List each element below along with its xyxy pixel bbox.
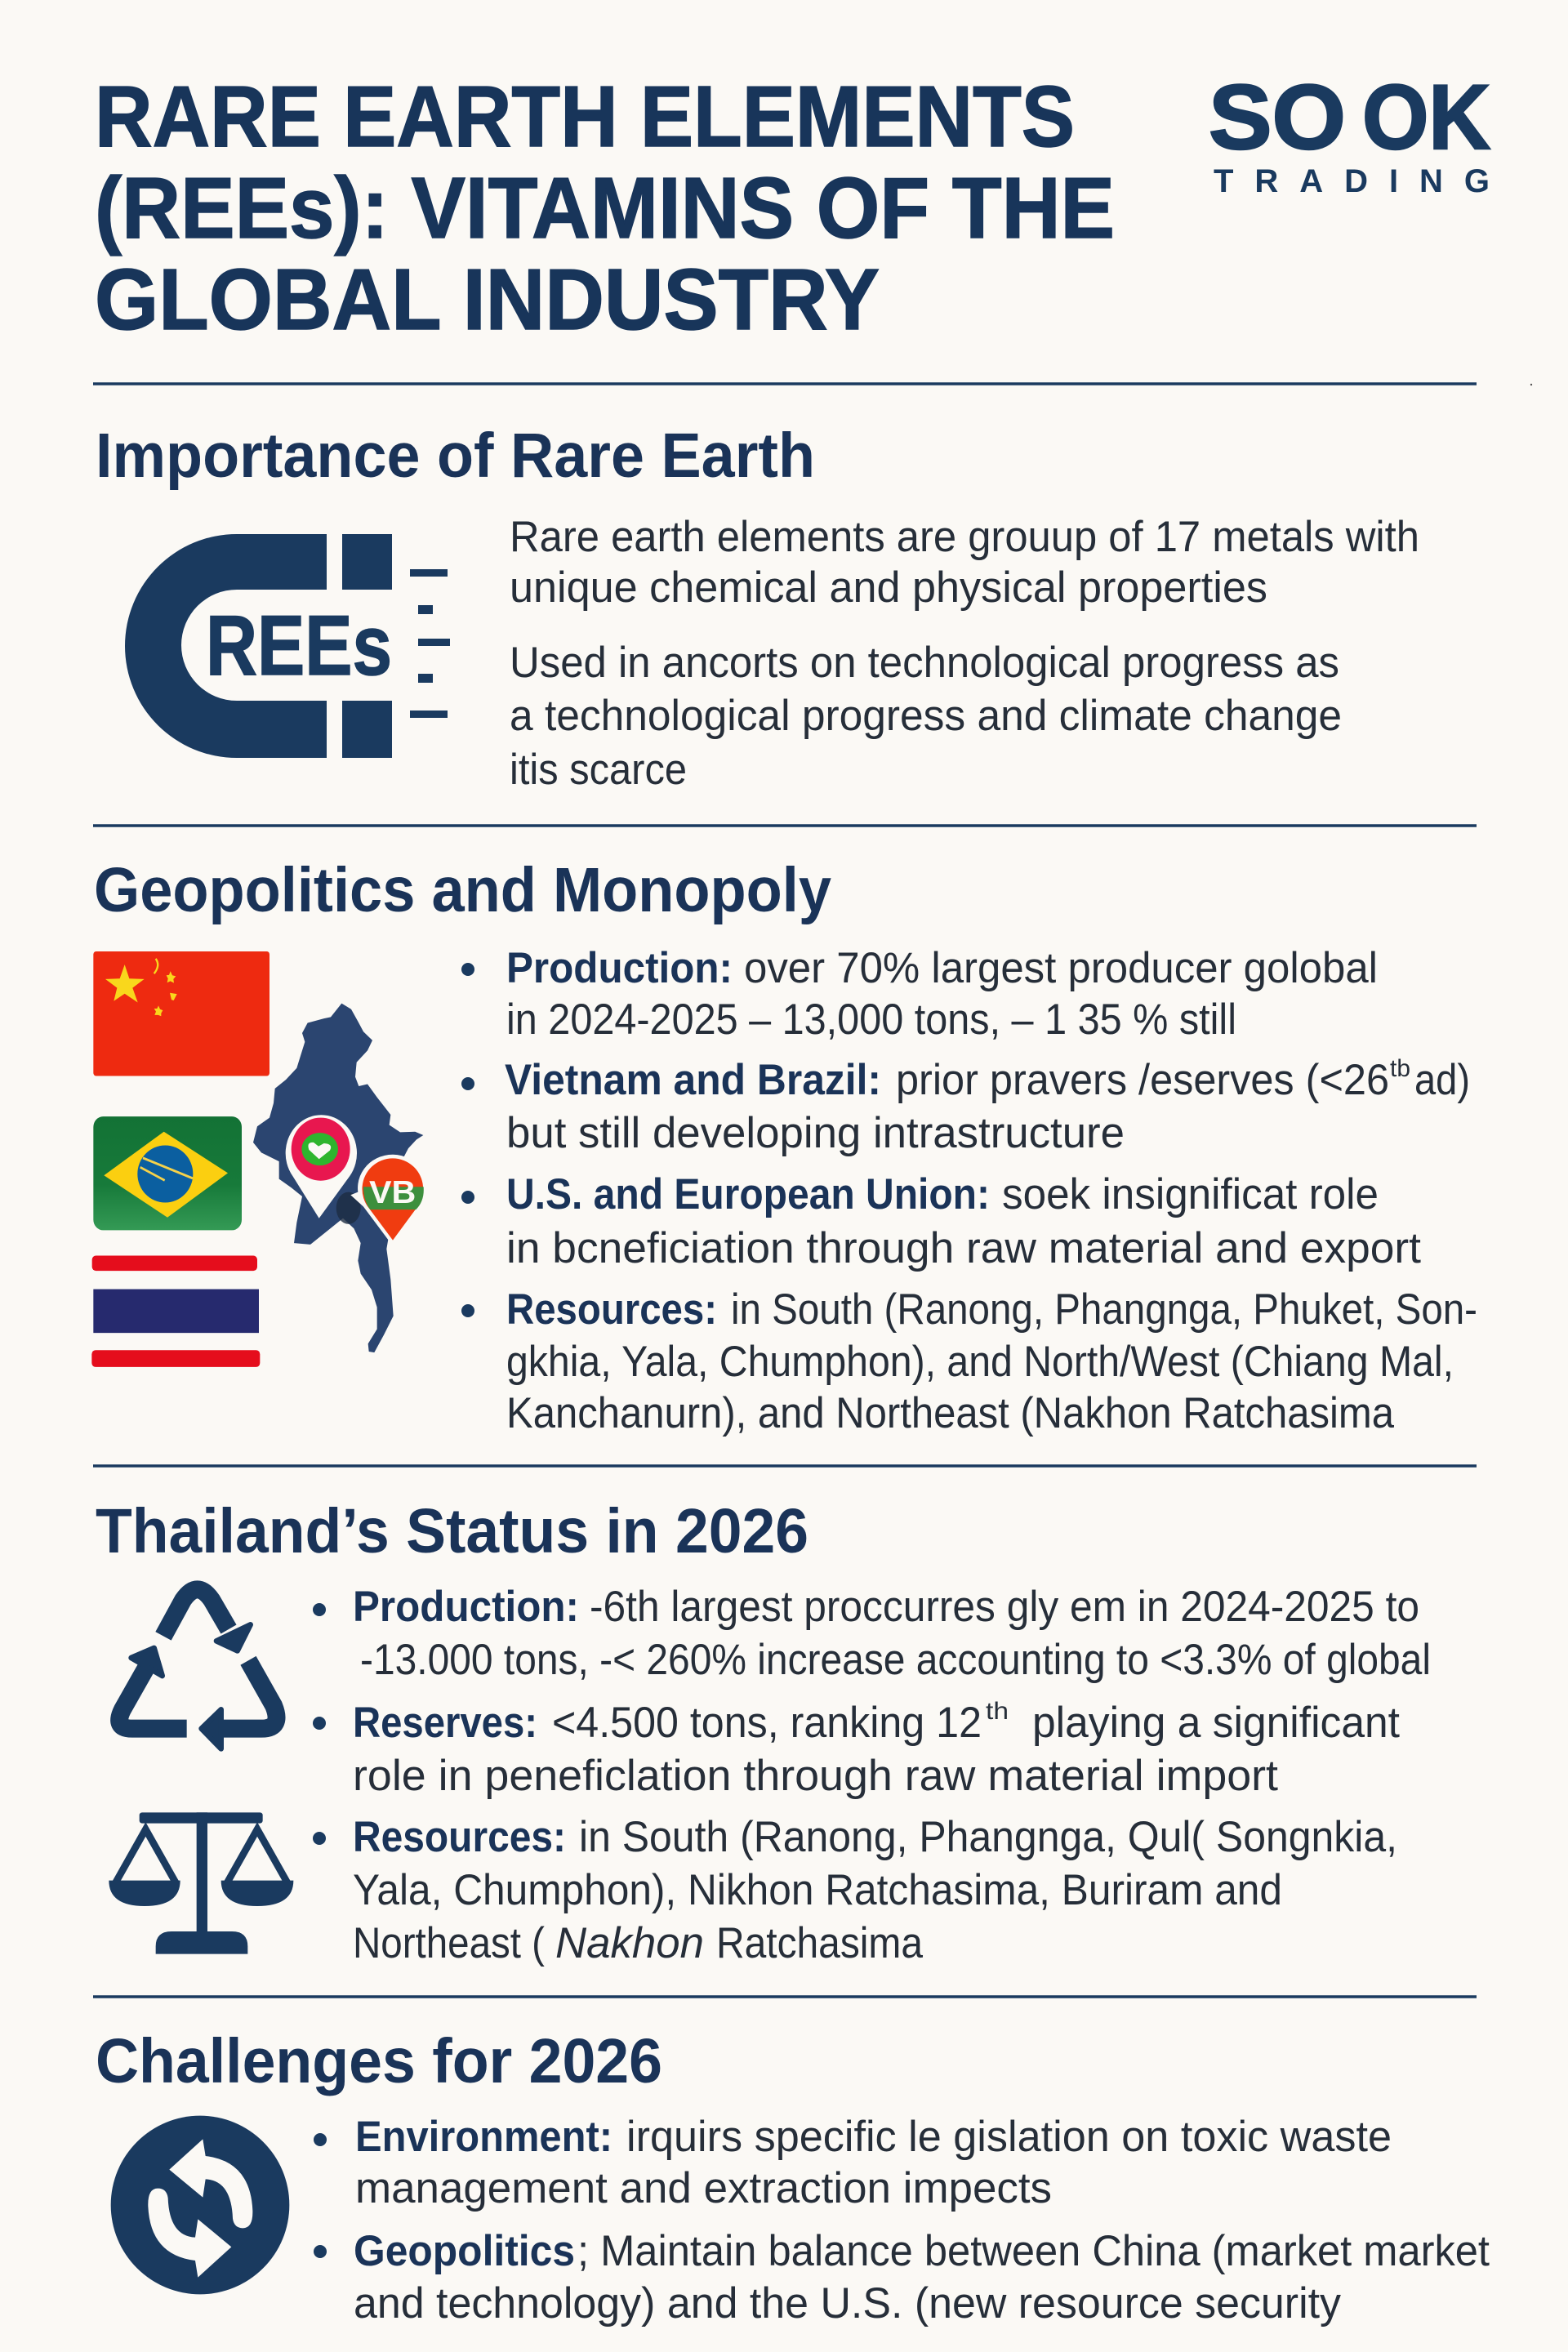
panel: Thailand's status in 2026	[96, 1496, 1431, 1967]
text block: importance description: unique chemical and physical properties	[510, 564, 1267, 612]
bullet list: Thailand status: Reserves:	[353, 1699, 537, 1747]
bullet list: geopolitics: Vietnam and Brazil:	[505, 1056, 881, 1104]
logo: So Ok Trading: OK	[1362, 66, 1490, 168]
bullet list: challenges: management and extraction impects	[355, 2164, 1052, 2212]
bullet list: geopolitics: tb	[1390, 1055, 1410, 1082]
heading: challenges: Challenges for 2026	[96, 2026, 662, 2096]
text block: importance description: Rare earth elements are grouup of 17 metals with	[510, 513, 1419, 561]
bullet list: geopolitics: in bcneficiation through raw material and export	[506, 1224, 1421, 1272]
text block: importance description: Used in ancorts on technological progress as	[510, 639, 1339, 687]
icon: REEs magnet: REEs	[206, 599, 392, 693]
bullet list: geopolitics: in South (Ranong, Phangnga, Phuket, Son-	[731, 1285, 1477, 1334]
icon: map with location pins	[253, 1004, 427, 1352]
bullet list: geopolitics	[461, 944, 1477, 1437]
bullet list: challenges: irquirs specific le gislation on toxic waste	[626, 2113, 1392, 2161]
bullet list: Thailand status: Yala, Chumphon), Nikhon Ratchasima, Buriram and	[353, 1866, 1282, 1914]
bullet list: Thailand status: Ratchasima	[716, 1919, 923, 1967]
icon: REEs magnet	[125, 534, 450, 758]
bullet list: Thailand status: in South (Ranong, Phangnga, Qul( Songnkia,	[579, 1813, 1397, 1861]
text block: importance description: a technological progress and climate change	[510, 692, 1342, 740]
logo: So Ok Trading	[1209, 66, 1490, 199]
text block: importance description: itis scarce	[510, 746, 687, 794]
bullet list: challenges	[314, 2113, 1490, 2328]
title: (REEs): VITAMINS OF THE	[95, 160, 1115, 256]
bullet list: Thailand status: Northeast (	[353, 1919, 545, 1967]
bullet list: challenges: Environment:	[355, 2113, 612, 2161]
icon: flag of Brazil	[93, 1116, 242, 1230]
heading: geopolitics: Geopolitics and Monopoly	[94, 855, 831, 925]
bullet list: geopolitics: Kanchanurn), and Northeast (Nakhon Ratchasima	[506, 1389, 1394, 1437]
pin: red and green heart	[286, 1115, 357, 1218]
panel: importance of rare earth	[96, 421, 1419, 794]
panel: challenges for 2026	[96, 2026, 1490, 2328]
bullet list: geopolitics: soek insignificat role	[1002, 1170, 1379, 1218]
bullet list: geopolitics: ad)	[1414, 1056, 1470, 1104]
bullet list: Thailand status: Production:	[353, 1583, 579, 1631]
bullet list: geopolitics: in 2024-2025 – 13,000 tons, – 1 35 % still	[506, 996, 1236, 1044]
bullet list: Thailand status	[313, 1583, 1431, 1967]
icon: flag of Thailand	[91, 1255, 260, 1367]
icon: circular refresh arrows	[111, 2116, 289, 2294]
bullet list: geopolitics: Resources:	[506, 1285, 717, 1334]
logo: So Ok Trading: SO	[1209, 66, 1346, 168]
panel: geopolitics and monopoly	[91, 855, 1477, 1437]
bullet list: challenges: ; Maintain balance between China (market market	[577, 2227, 1490, 2275]
bullet list: Thailand status: playing a significant	[1032, 1699, 1400, 1747]
title	[95, 69, 1115, 348]
heading: Thailand status: Thailand’s Status in 2026	[96, 1496, 808, 1566]
bullet list: Thailand status: <4.500 tons, ranking 12	[552, 1699, 982, 1747]
bullet list: Thailand status: th	[986, 1698, 1009, 1725]
bullet list: geopolitics: U.S. and European Union:	[506, 1170, 990, 1218]
heading: importance: Importance of Rare Earth	[96, 421, 815, 491]
bullet list: challenges: Geopolitics	[354, 2227, 575, 2275]
bullet list: Thailand status: -13.000 tons, -< 260% increase accounting to <3.3% of global	[360, 1636, 1431, 1684]
logo: So Ok Trading: TRADING	[1214, 163, 1490, 199]
bullet list: geopolitics: gkhia, Yala, Chumphon), and North/West (Chiang Mal,	[506, 1338, 1454, 1386]
bullet list: Thailand status: -6th largest proccurres gly em in 2024-2025 to	[590, 1583, 1419, 1631]
bullet list: challenges: and technology) and the U.S. (new resource security	[354, 2279, 1341, 2328]
bullet list: geopolitics: prior pravers /eserves (<26	[896, 1056, 1389, 1104]
bullet list: geopolitics: Production:	[506, 944, 733, 992]
bullet list: geopolitics: over 70% largest producer golobal	[744, 944, 1378, 992]
pin: VB marker: VB	[369, 1174, 416, 1209]
pin: VB marker	[350, 1155, 427, 1246]
icon: recycling arrows	[119, 1589, 277, 1748]
title: RARE EARTH ELEMENTS	[95, 69, 1075, 165]
bullet list: Thailand status: Nakhon	[555, 1919, 704, 1967]
bullet list: geopolitics: but still developing intrastructure	[506, 1109, 1125, 1157]
bullet list: Thailand status: Resources:	[353, 1813, 566, 1861]
text block: importance description	[510, 513, 1419, 794]
icon: balance scale	[109, 1812, 293, 1954]
title: GLOBAL INDUSTRY	[95, 252, 880, 348]
icon: flag of China	[93, 951, 270, 1076]
bullet list: Thailand status: role in peneficlation through raw material import	[353, 1752, 1278, 1800]
